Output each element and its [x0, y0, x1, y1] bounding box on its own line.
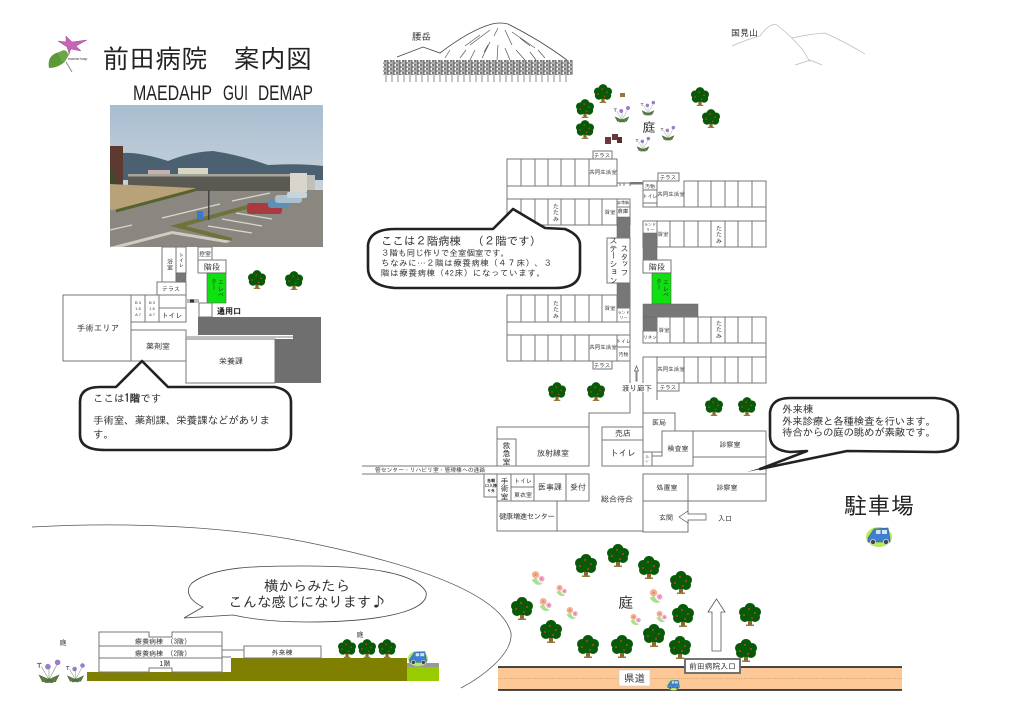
icon: tree	[511, 597, 533, 620]
elevator: エレベ	[217, 279, 224, 297]
callout: outpatient: 外来診療と各種検査を行います。	[782, 415, 936, 427]
icon: tree	[338, 639, 356, 658]
mountain: Kunimiyama: 国見山	[731, 29, 758, 38]
room: toilet: トイレ	[514, 478, 532, 485]
room: consultation upper: 診察室	[720, 441, 740, 449]
icon: tree	[705, 397, 723, 416]
subtitle	[133, 82, 313, 105]
upper left ward: 倉庫	[618, 208, 629, 215]
room: health center: 健康増進センター	[499, 512, 555, 521]
large arc	[32, 525, 511, 688]
label: 庭	[642, 121, 656, 134]
upper left ward: 非常階	[617, 200, 629, 205]
icon: flowers	[566, 607, 578, 619]
room: health center	[497, 501, 557, 531]
logo: flower: maeda hosp	[68, 57, 87, 61]
icon: tree	[248, 270, 266, 289]
room: nutrition	[186, 339, 275, 383]
staff entrance: 通用口	[217, 307, 241, 316]
arrow: entrance	[679, 511, 706, 523]
stairs: 階段	[204, 263, 220, 272]
icon: tree	[670, 571, 692, 594]
elevator	[652, 273, 671, 304]
lower left ward: 汚物	[618, 351, 628, 358]
building: ward	[99, 632, 222, 672]
small rooms: B 3	[135, 300, 142, 305]
building: outpatient	[244, 646, 321, 658]
photo: hospital exterior	[110, 105, 323, 247]
callout: 2nd floor: 階は療養病棟（42床）になっています。	[381, 268, 545, 278]
lower right ward	[643, 317, 766, 413]
icon: tree	[378, 639, 396, 658]
floor plan: 2nd floor	[507, 151, 766, 427]
small rooms: A 7	[149, 312, 156, 317]
lower left ward: 浴室	[604, 305, 616, 312]
elevator: ター	[655, 278, 662, 290]
lower left ward	[507, 283, 631, 370]
icon: flowers	[532, 571, 544, 585]
connector	[222, 650, 244, 657]
bath and toilet: 浴室	[166, 258, 173, 270]
callout: 2nd floor: ここは２階病棟 （２階です）	[381, 235, 541, 247]
icon: tree	[735, 639, 757, 662]
lower right ward: リネン	[643, 335, 657, 340]
corridor and arrow: 渡り廊下	[622, 384, 652, 393]
icon: tree	[672, 604, 694, 627]
gray building areas	[186, 317, 321, 383]
callout: 2nd floor	[368, 209, 580, 288]
icon: flowers	[540, 598, 552, 611]
elevator: ター	[210, 278, 217, 290]
icon: tree	[576, 120, 594, 139]
corridor to rehabilitation	[362, 466, 589, 474]
staff station: スタッフ	[620, 244, 628, 276]
room: pharmacy office	[643, 413, 675, 452]
icon: tree	[669, 636, 691, 659]
subtitle: DEMAP	[258, 82, 313, 105]
room: toilet: トイレ	[610, 448, 636, 458]
lower left ward: ランド	[618, 310, 630, 315]
icon: car	[408, 651, 428, 666]
icon: car on road	[667, 680, 680, 690]
icon: tree	[576, 99, 594, 118]
corridor to rehabilitation: 管センター・リハビリ室・管理棟への通路	[375, 466, 485, 474]
icon: tree	[643, 624, 665, 647]
building: outpatient: 外来棟	[272, 649, 292, 657]
icon: tree	[702, 109, 720, 128]
label: garden left: 庭	[60, 639, 68, 647]
small rooms: トイレ	[162, 312, 182, 320]
speech bubble	[184, 566, 426, 622]
upper left ward: テラス	[594, 154, 610, 160]
subtitle: GUI	[223, 82, 248, 105]
upper left ward: 浴室	[604, 209, 616, 216]
lower right ward: 浴室	[658, 327, 670, 334]
icon: tree	[691, 87, 709, 106]
callout: 1st floor: ここは1階です	[93, 392, 161, 404]
speech bubble: こんな感じになります♪	[228, 594, 386, 609]
corridor and arrow	[589, 238, 652, 427]
label: garden: 庭	[618, 595, 634, 610]
room: reception: 受付	[570, 483, 586, 492]
lower left ward: たたみ	[552, 300, 559, 319]
room: consultation upper	[693, 431, 766, 457]
icon: flowers	[556, 585, 567, 596]
callout: outpatient	[747, 398, 958, 472]
upper right ward: たたみ	[715, 225, 722, 244]
arrow: up to hospital	[708, 599, 725, 651]
small room: ﾍﾞ	[646, 460, 650, 464]
room: changing	[511, 487, 534, 501]
room: pharmacy	[131, 330, 186, 361]
icon: violet	[66, 663, 85, 682]
icon: tree	[587, 382, 605, 401]
room: radiology	[497, 427, 589, 466]
icon: tree	[358, 639, 376, 658]
callout: 1st floor	[80, 361, 291, 450]
stairs	[643, 260, 671, 273]
room: radiology: 放射線室	[537, 449, 569, 458]
upper left ward: 共同生活室	[589, 169, 617, 176]
room: emergency	[497, 439, 516, 466]
small room: ｴﾚ	[646, 455, 650, 459]
garden: upper	[576, 84, 720, 151]
room: entrance small: り外	[487, 488, 495, 493]
staff entrance	[199, 303, 241, 317]
upper right ward: 汚物	[645, 183, 655, 190]
lower left ward: トイレ	[616, 339, 631, 345]
icon: tree	[638, 556, 660, 579]
icon: pots	[605, 93, 625, 144]
staff station	[607, 236, 630, 284]
room: surgery area	[63, 295, 131, 361]
small rooms	[131, 295, 186, 322]
icon: tree	[577, 635, 599, 658]
icon: violet	[661, 126, 675, 140]
icon: parking car	[866, 527, 892, 547]
room: entrance small: 急職	[487, 478, 495, 483]
icon: flowers	[650, 589, 662, 603]
building: ward: 1階	[160, 660, 170, 668]
mountain: Koshidake: 腰岳	[412, 32, 432, 42]
callout: 2nd floor: ちなみに…２階は療養病棟（４７床）、３	[381, 258, 552, 268]
icon: flowers	[630, 614, 641, 625]
room: pharmacy: 薬剤室	[146, 342, 170, 351]
waiting hall	[557, 474, 643, 531]
waiting room: 控室	[199, 251, 211, 258]
room: toilet	[511, 474, 534, 487]
room: shop: 売店	[615, 429, 631, 438]
lower left ward: テラス	[594, 364, 610, 370]
road	[498, 659, 902, 690]
mountain: Koshidake	[383, 23, 573, 82]
gray service areas	[643, 304, 698, 331]
room: emergency: 救急室	[502, 441, 510, 465]
icon: tree	[548, 382, 566, 401]
label: hospital entrance	[685, 659, 740, 673]
small rooms: 1 8	[135, 306, 142, 311]
room: consultation lower	[688, 474, 766, 501]
heading: parking: 駐車場	[844, 494, 914, 517]
room: laboratory	[652, 431, 693, 466]
room: medical affairs	[534, 474, 566, 501]
bath and toilet	[162, 247, 186, 282]
room: operating	[497, 474, 511, 501]
staff station: ステーション	[608, 236, 618, 284]
elevator: エレベ	[662, 279, 669, 297]
connector	[186, 299, 199, 303]
room: toilet	[602, 440, 643, 466]
room: shop	[602, 427, 643, 440]
lower right ward: たたみ	[715, 320, 722, 339]
floor plan: 1st floor	[63, 247, 321, 383]
small room	[643, 452, 652, 466]
label: hospital entrance: 前田病院入口	[689, 662, 736, 671]
ground	[87, 658, 439, 681]
lower right ward: 共同生活室	[657, 366, 685, 373]
elevator	[207, 273, 226, 303]
bath and toilet: トイレ	[178, 252, 184, 268]
icon: tree	[285, 271, 303, 290]
logo: flower	[49, 36, 87, 72]
speech bubble: 横からみたら	[264, 578, 350, 593]
upper left ward: たたみ	[552, 203, 559, 222]
lower left ward: リー	[620, 315, 628, 320]
room: surgery area: 手術エリア	[77, 323, 119, 333]
label: entrance: 入口	[718, 516, 732, 523]
building: ward: 療養病棟 (2階)	[135, 649, 188, 657]
icon: violet	[37, 660, 60, 683]
room: nutrition: 栄養課	[219, 357, 243, 366]
waiting hall: 総合待合	[601, 495, 633, 504]
icon: tree	[607, 544, 629, 567]
upper right ward: 共同生活室	[657, 191, 685, 198]
room: treatment	[643, 474, 688, 501]
side view panel	[32, 525, 511, 688]
room: entrance hall: 玄関	[659, 514, 673, 522]
icon: violet	[614, 106, 630, 122]
stairs: 階段	[649, 263, 665, 272]
waiting room	[198, 247, 212, 260]
lower right ward: テラス	[660, 386, 676, 392]
icon: tree	[540, 620, 562, 643]
room: consultation lower: 診察室	[716, 484, 738, 492]
upper right ward: トイレ	[642, 194, 658, 200]
callout: 1st floor: 手術室、薬剤課、栄養課などがありま	[93, 415, 270, 426]
terrace: テラス	[162, 286, 180, 293]
callout: 1st floor: す。	[93, 430, 114, 440]
trees near corridor	[548, 382, 756, 416]
room: operating: 手術室	[500, 476, 508, 500]
icon: tree	[594, 84, 612, 103]
room: medical affairs: 医事課	[538, 483, 562, 492]
small rooms: 1 8	[149, 306, 156, 311]
upper left ward	[507, 151, 643, 238]
small rooms: B 3	[149, 300, 156, 305]
label: prefectural road	[619, 670, 650, 686]
icon: violet	[636, 137, 650, 151]
icon: flowers	[656, 611, 667, 622]
building: ward: 療養病棟 (3階)	[135, 637, 188, 645]
stairs	[198, 260, 226, 273]
room: pharmacy office: 医局	[652, 420, 666, 427]
upper right ward: リー	[646, 227, 654, 232]
room: entrance small: 口入棟	[485, 483, 497, 488]
room: reception	[566, 474, 589, 501]
garden: lower	[511, 544, 761, 662]
icon: tree	[611, 635, 633, 658]
room: entrance hall	[643, 501, 688, 532]
title: 前田病院 案内図	[103, 46, 312, 72]
upper right ward	[642, 173, 766, 260]
label: prefectural road: 県道	[624, 673, 646, 684]
lower left ward: 共同生活室	[589, 344, 617, 351]
floor plan: outpatient building	[362, 413, 766, 532]
icon: tree	[738, 397, 756, 416]
callout: outpatient: 待合からの庭の眺めが素敵です。	[782, 427, 936, 438]
upper right ward: 浴室	[658, 231, 669, 238]
room: treatment: 処置室	[656, 484, 678, 492]
upper right ward: ランド	[644, 222, 656, 227]
room: changing: 更衣室	[514, 492, 532, 499]
icon: tree	[739, 603, 761, 626]
upper right ward: テラス	[660, 176, 676, 182]
callout: 2nd floor: ３階も同じ作りで全室個室です。	[381, 248, 509, 258]
callout: outpatient: 外来棟	[782, 404, 814, 415]
room: entrance small	[484, 474, 497, 497]
terrace	[157, 282, 186, 295]
label: garden right: 庭	[356, 631, 364, 639]
icon: tree	[575, 554, 597, 577]
room: laboratory: 検査室	[666, 444, 688, 453]
icon: violet	[641, 101, 655, 115]
small rooms: A 7	[135, 312, 142, 317]
subtitle: MAEDAHP	[133, 82, 212, 105]
mountain: Kunimiyama	[731, 24, 865, 65]
room extension	[643, 457, 766, 474]
